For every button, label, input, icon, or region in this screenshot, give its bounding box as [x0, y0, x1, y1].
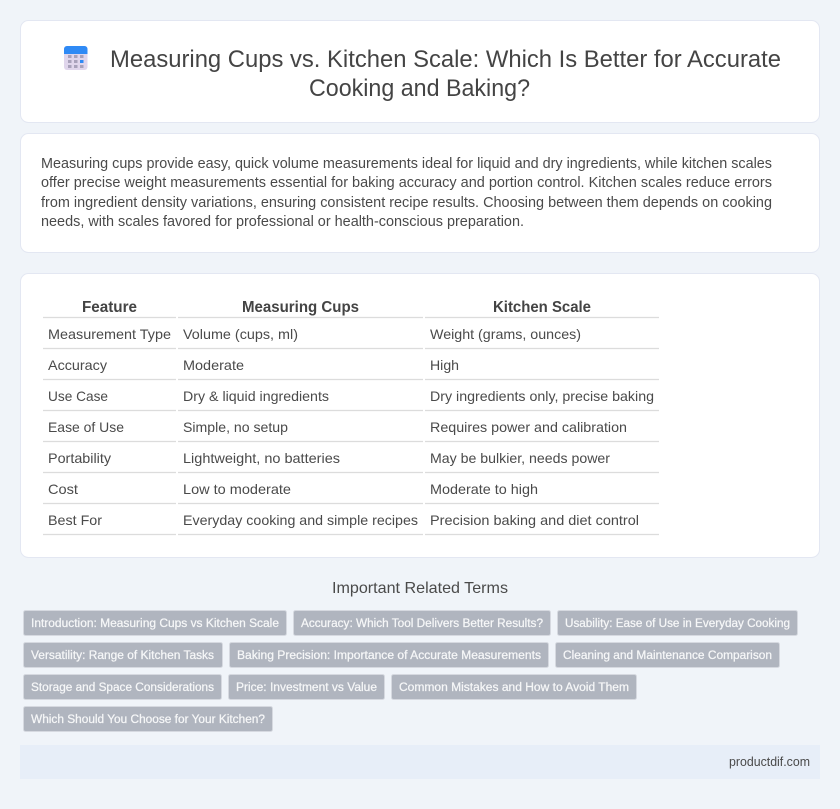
tag: price: Price: Investment vs Value — [236, 680, 377, 694]
footer source: productdif.com — [729, 755, 810, 769]
heading: important related terms: Important Related Terms — [332, 580, 508, 597]
row: portability: May be bulkier, needs power — [430, 450, 610, 466]
tag: baking precision — [230, 642, 548, 668]
tag: introduction — [24, 610, 286, 636]
title: Measuring Cups vs. Kitchen Scale: Which Is Better for Accurate — [110, 46, 781, 73]
row: cost: Cost — [48, 481, 78, 497]
table header row: Measuring Cups — [242, 299, 359, 316]
panel: comparison table — [20, 274, 820, 558]
row: ease of use: Requires power and calibration — [430, 419, 627, 435]
panel: title header — [20, 20, 820, 122]
tag: versatility — [24, 642, 222, 668]
row: best for: Best For — [48, 512, 102, 528]
table header row: Kitchen Scale — [493, 299, 591, 316]
tag: baking precision: Baking Precision: Importance of Accurate Measurements — [237, 648, 541, 662]
row: measurement type: Volume (cups, ml) — [183, 326, 298, 342]
table header row — [82, 299, 591, 316]
tag: usability — [558, 610, 798, 636]
row: accuracy: Accuracy — [48, 357, 107, 373]
row: measurement type: Weight (grams, ounces) — [430, 326, 581, 342]
tag: storage: Storage and Space Considerations — [31, 680, 214, 694]
tag: which to choose: Which Should You Choose for Your Kitchen? — [31, 712, 265, 726]
row: use case: Use Case — [48, 388, 108, 404]
summary paragraph: needs, with scales favored for professional or health-conscious preparation. — [41, 214, 524, 230]
row: ease of use: Ease of Use — [48, 419, 124, 435]
summary paragraph — [41, 156, 772, 230]
row: use case: Dry & liquid ingredients — [183, 388, 329, 404]
row: accuracy: High — [430, 357, 459, 373]
row: accuracy — [48, 357, 459, 373]
row: ease of use — [48, 419, 627, 435]
row: best for: Precision baking and diet control — [430, 512, 639, 528]
tag: accuracy — [294, 610, 550, 636]
row: ease of use: Simple, no setup — [183, 419, 288, 435]
tag: accuracy: Accuracy: Which Tool Delivers Better Results? — [301, 616, 543, 630]
tag: price — [228, 674, 384, 700]
tag: introduction: Introduction: Measuring Cups vs Kitchen Scale — [31, 616, 279, 630]
summary paragraph: Measuring cups provide easy, quick volume measurements ideal for liquid and dry ingredients, while kitchen scales — [41, 156, 772, 172]
tag: versatility: Versatility: Range of Kitchen Tasks — [31, 648, 214, 662]
panel: summary text — [20, 134, 820, 252]
tag: cleaning — [556, 642, 780, 668]
title: Cooking and Baking? — [309, 75, 530, 102]
tag: which to choose — [24, 706, 272, 732]
summary paragraph: from ingredient density variations, ensuring consistent recipe results. Choosing between them depends on cooking — [41, 195, 772, 211]
row: best for: Everyday cooking and simple recipes — [183, 512, 418, 528]
row: portability: Lightweight, no batteries — [183, 450, 340, 466]
row: cost: Moderate to high — [430, 481, 538, 497]
footer bar — [20, 745, 820, 779]
title — [110, 46, 781, 102]
row: measurement type — [48, 326, 581, 342]
related term tags — [24, 610, 798, 732]
tag: usability: Usability: Ease of Use in Everyday Cooking — [565, 616, 790, 630]
row: cost: Low to moderate — [183, 481, 291, 497]
row: cost — [48, 481, 538, 497]
tag: cleaning: Cleaning and Maintenance Comparison — [563, 648, 772, 662]
tag: common mistakes — [392, 674, 636, 700]
row: use case: Dry ingredients only, precise baking — [430, 388, 654, 404]
tag: storage — [24, 674, 222, 700]
table header row: Feature — [82, 299, 137, 316]
row: portability: Portability — [48, 450, 111, 466]
row: best for — [48, 512, 639, 528]
tag: common mistakes: Common Mistakes and How to Avoid Them — [399, 680, 629, 694]
row: portability — [48, 450, 610, 466]
summary paragraph: offer precise weight measurements essential for baking accuracy and portion control. Kitchen scales reduce errors — [41, 175, 772, 191]
row: use case — [48, 388, 654, 404]
row: accuracy: Moderate — [183, 357, 244, 373]
row: measurement type: Measurement Type — [48, 326, 171, 342]
icon: calendar grid — [64, 46, 88, 70]
